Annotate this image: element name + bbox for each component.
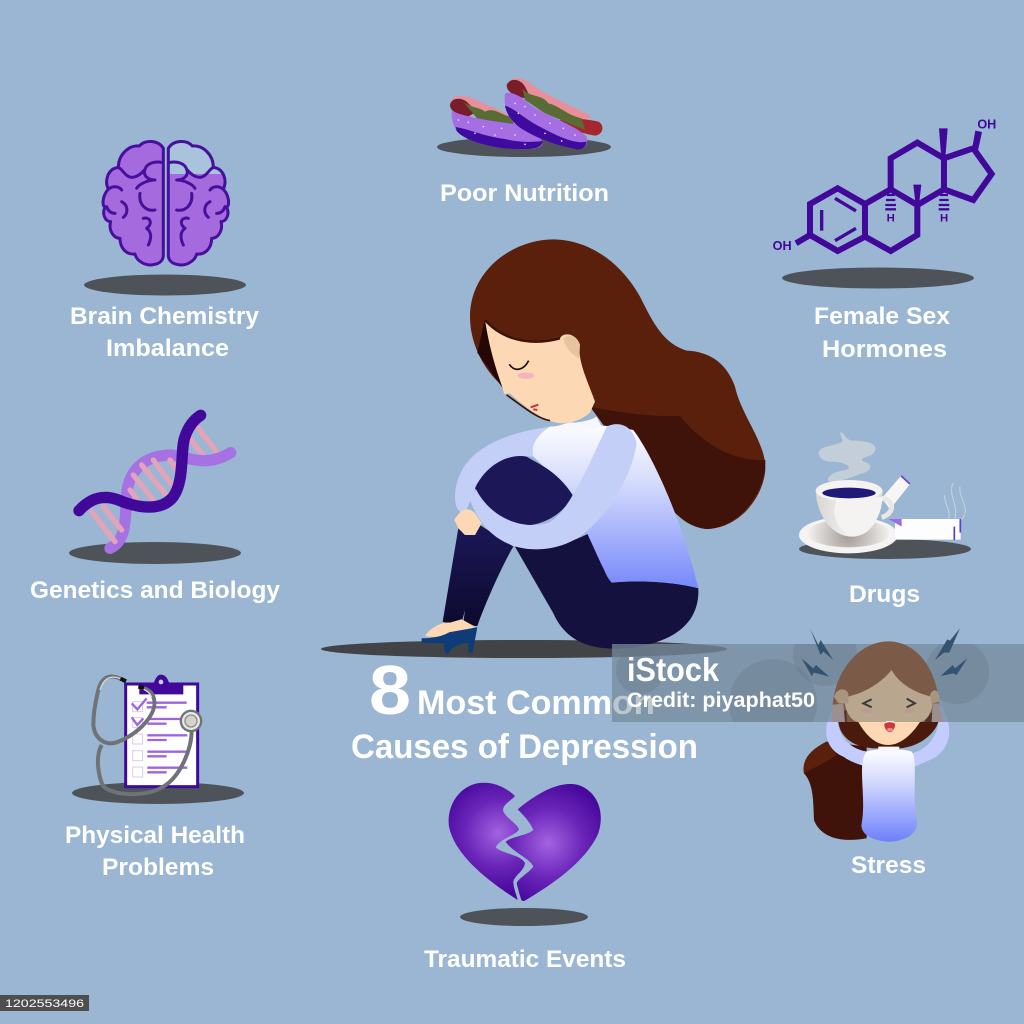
shoes <box>425 619 475 637</box>
collar <box>550 417 602 437</box>
label: brain chemistry imbalance: Imbalance <box>106 335 229 362</box>
title: Most Comm <box>417 684 612 722</box>
label: traumatic events: Traumatic Events <box>424 946 626 973</box>
icon: hormone molecule: OH <box>773 239 792 253</box>
watermark text: iStock <box>627 651 720 688</box>
label: brain chemistry imbalance: Brain Chemistry <box>70 303 260 330</box>
shirt <box>533 425 698 588</box>
eye, blush, fringe and mouth <box>485 320 560 421</box>
body <box>861 749 917 842</box>
image id tag: 1202553496 <box>5 998 84 1010</box>
label: physical health problems: Physical Health <box>65 822 245 849</box>
figure: sad woman sitting <box>422 239 765 654</box>
watermark banner <box>612 644 1024 722</box>
icon: hot dogs <box>437 78 611 157</box>
icon: stressed woman <box>804 703 949 842</box>
seat and thigh <box>515 532 698 649</box>
title: on <box>612 684 655 722</box>
stress bolts <box>802 628 967 677</box>
image id tag <box>0 995 89 1011</box>
face <box>485 320 595 423</box>
icon: brain <box>84 141 246 296</box>
title: Causes of Depression <box>351 728 698 766</box>
hair <box>470 239 765 529</box>
ear <box>563 336 580 358</box>
title: 8 <box>369 651 411 729</box>
icon: hormone molecule <box>773 117 996 288</box>
title <box>351 651 698 766</box>
watermark text: Credit: piyaphat50 <box>627 689 815 712</box>
ground shadow under woman <box>321 640 727 658</box>
label: stress: Stress <box>851 852 926 879</box>
icon: clipboard and stethoscope <box>72 675 244 804</box>
icon: coffee and cigarettes <box>799 433 971 559</box>
label: physical health problems: Problems <box>102 854 214 881</box>
arms <box>826 703 868 767</box>
back hair <box>804 742 867 840</box>
stressed woman head seen through banner <box>802 628 967 722</box>
icon: dna helix <box>69 415 241 564</box>
back arm <box>455 427 550 513</box>
knee <box>475 456 573 526</box>
legs <box>443 525 513 626</box>
hand <box>454 509 482 535</box>
icon: hormone molecule: OH <box>977 117 996 131</box>
neck hair and lower face below banner <box>838 722 938 748</box>
label: drugs: Drugs <box>849 581 920 608</box>
watermark text <box>627 651 815 712</box>
front arm <box>470 424 637 549</box>
icon: broken heart <box>449 783 601 926</box>
label: poor nutrition: Poor Nutrition <box>440 180 609 207</box>
label: female sex hormones: Hormones <box>822 336 947 363</box>
hair shadow <box>590 407 765 529</box>
icon: hormone molecule: H <box>887 213 895 225</box>
label: female sex hormones: Female Sex <box>814 303 951 330</box>
icon: hormone molecule: H <box>940 213 948 225</box>
label: genetics and biology: Genetics and Biology <box>30 577 281 604</box>
